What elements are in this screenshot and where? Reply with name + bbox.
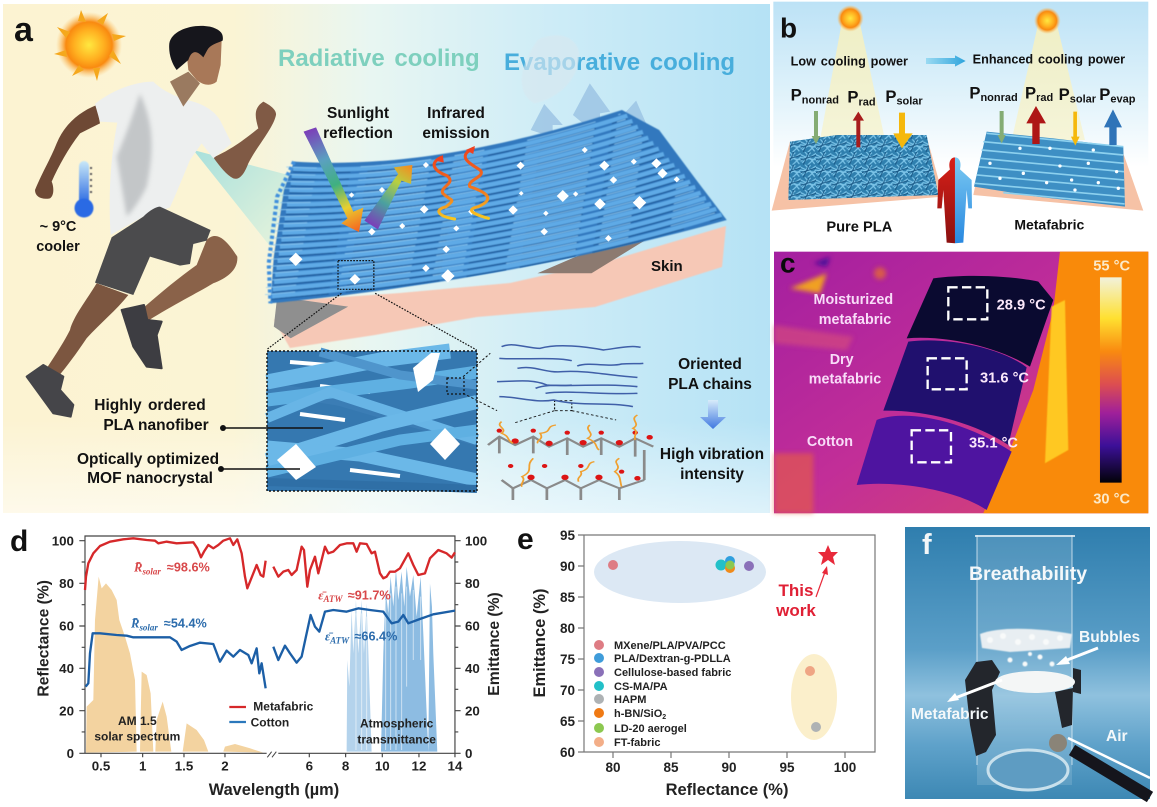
infrared emission waves — [434, 146, 488, 219]
annotation: cotton solar reflectance: R̄ — [130, 617, 139, 631]
label: oriented PLA chains: Oriented — [678, 356, 742, 373]
warm regions — [774, 257, 886, 513]
annotation: metafabric solar reflectance: R̄ — [133, 561, 142, 575]
legend — [594, 640, 731, 749]
right y-axis numbers: 0 — [465, 746, 472, 761]
arrow: air inflow — [1068, 738, 1150, 778]
y-axis numbers: 75 — [560, 652, 575, 667]
x-axis numbers: 12 — [412, 758, 426, 773]
x-axis numbers: 95 — [779, 760, 795, 775]
label: sunlight reflection: Sunlight — [327, 105, 389, 122]
y-axis numbers: 60 — [560, 745, 575, 760]
power labels: metafabric: P — [1059, 85, 1070, 104]
temperature drop label: cooler — [36, 239, 80, 255]
y-axis numbers: 70 — [560, 683, 575, 698]
x-axis numbers: 8 — [342, 758, 349, 773]
power labels: metafabric: P — [1025, 83, 1036, 102]
power labels: metafabric: P — [1099, 85, 1110, 104]
region ellipses — [594, 541, 837, 740]
left y-axis numbers: 0 — [67, 746, 74, 761]
legend: Cotton — [251, 716, 289, 730]
power labels: metafabric: nonrad — [980, 92, 1018, 104]
legend: FT-fabric — [614, 737, 660, 749]
label: infrared emission: emission — [422, 125, 490, 142]
oriented PLA chains and molecular structure — [463, 345, 653, 500]
selection box and zoom guides — [267, 261, 477, 350]
legend: HAPM — [614, 694, 646, 706]
annotation: metafabric atmospheric window emittance: ATW — [323, 594, 343, 604]
icon: human half red half blue — [937, 157, 972, 243]
clips — [965, 660, 1081, 756]
colour bar labels: 55 °C — [1093, 259, 1130, 275]
annotation: cotton solar reflectance: ≈54.4% — [164, 617, 207, 631]
temperature colour bar — [1100, 277, 1122, 483]
x-axis numbers: 1.5 — [175, 758, 194, 773]
foam bubbles — [980, 629, 1072, 666]
left y-axis numbers — [52, 533, 74, 761]
enhanced cooling power label: Enhanced cooling power — [973, 52, 1125, 66]
x-axis numbers — [92, 758, 463, 773]
right y-axis numbers — [465, 533, 487, 761]
legend: h-BN/SiO — [614, 708, 662, 720]
power labels: pure PLA: nonrad — [802, 94, 839, 106]
y-axis title: Emittance (%) — [531, 588, 549, 698]
temperature drop label: ~ 9°C — [40, 219, 77, 235]
power labels: pure PLA: P — [885, 87, 896, 106]
warm band along the arm — [1045, 300, 1068, 463]
annotation: cotton atmospheric window emittance: ≈66.4% — [354, 630, 397, 644]
label: breathability: Breathability — [969, 563, 1087, 585]
legend — [229, 700, 314, 730]
measurement boxes — [912, 287, 987, 462]
power labels: metafabric: solar — [1070, 94, 1097, 106]
label: metafabric: Metafabric — [1014, 216, 1084, 232]
power labels: pure PLA: solar — [896, 96, 923, 108]
metafabric skin and fibers — [973, 132, 1143, 211]
label: PLA nanofiber: PLA nanofiber — [103, 417, 209, 434]
this work label: work — [775, 601, 816, 620]
AM 1.5 solar spectrum area — [86, 577, 263, 753]
legend: PLA/Dextran-g-PDLLA — [614, 653, 731, 665]
y-axis numbers: 85 — [560, 590, 575, 605]
x-axis numbers: 85 — [663, 760, 679, 775]
annotation: cotton atmospheric window emittance: ATW — [329, 635, 350, 645]
panel a: cooling mechanism overview — [3, 4, 770, 513]
label: MOF nanocrystal: Optically optimized — [77, 451, 219, 468]
label: bubbles: Bubbles — [1079, 629, 1140, 646]
x-axis numbers — [605, 760, 856, 775]
colour bar labels — [1093, 259, 1130, 507]
temperature readings: 28.9 °C — [997, 297, 1046, 313]
heading: radiative cooling: Radiative cooling — [278, 45, 480, 72]
low cooling power label: Low cooling power — [791, 54, 908, 68]
skin layer — [274, 226, 726, 348]
panel label c: c — [780, 248, 796, 279]
label: metafabric: Metafabric — [911, 706, 989, 723]
leader line: PLA nanofiber — [220, 425, 323, 431]
icon: thermometer — [74, 161, 94, 218]
y-axis numbers: 95 — [560, 528, 575, 543]
panel e: scatter comparison chart — [517, 523, 875, 799]
moisturized metafabric region — [907, 276, 1053, 367]
leader line: MOF nanocrystal — [218, 466, 300, 472]
label: PLA nanofiber: Highly ordered — [94, 397, 206, 414]
sunlight reflection arrows — [304, 127, 412, 232]
heading: evaporative cooling: Evaporative cooling — [504, 49, 735, 76]
label: AM 1.5 solar spectrum: solar spectrum — [94, 730, 180, 744]
fabric layer with fibers and crystals — [265, 110, 727, 350]
cotton curve — [86, 608, 455, 688]
x-axis numbers: 10 — [375, 758, 390, 773]
icon: suns — [837, 5, 1061, 34]
right y-axis numbers: 20 — [465, 703, 480, 718]
annotation: metafabric solar reflectance: ≈98.6% — [167, 561, 210, 575]
legend: Metafabric — [253, 700, 314, 714]
y-axis numbers: 80 — [560, 621, 575, 636]
temperature readings — [969, 297, 1046, 451]
power labels: pure PLA: P — [791, 86, 802, 105]
air tube — [1049, 734, 1150, 797]
this work label: This — [779, 581, 813, 600]
power labels: metafabric: evap — [1110, 94, 1136, 106]
label: oriented PLA chains: PLA chains — [668, 376, 752, 393]
panel label b: b — [780, 12, 797, 43]
arrow: metafabric — [947, 680, 1002, 702]
x-axis title: Reflectance (%) — [666, 781, 788, 799]
x-axis numbers: 6 — [306, 758, 313, 773]
evaporation vapor and arrows — [522, 35, 649, 137]
x-axis numbers: 0.5 — [92, 758, 111, 773]
x-axis numbers: 2 — [221, 758, 229, 773]
zoom inset: nanofibers and MOF crystals — [267, 351, 477, 491]
metafabric disc — [995, 671, 1075, 693]
axes frame and ticks — [79, 536, 461, 757]
panel label f: f — [922, 529, 932, 561]
y-axis numbers: 65 — [560, 714, 575, 729]
label: atmospheric transmittance: transmittance — [357, 732, 436, 746]
legend: CS-MA/PA — [614, 681, 668, 693]
pure PLA skin and mesh — [772, 135, 943, 211]
x-axis numbers: 80 — [605, 760, 621, 775]
fabric labels — [807, 292, 893, 450]
fabric labels: metafabric — [819, 312, 891, 328]
glass cylinder — [975, 535, 1075, 790]
x-axis numbers: 14 — [448, 758, 463, 773]
sun beams — [820, 23, 1085, 140]
y-axis numbers: 90 — [560, 559, 575, 574]
panel f: breathability photo — [905, 527, 1150, 799]
power labels: pure PLA — [791, 86, 923, 108]
annotation: cotton atmospheric window emittance: ε̄ — [325, 630, 334, 644]
x-axis numbers: 90 — [721, 760, 737, 775]
panel label e: e — [517, 523, 534, 556]
power labels: pure PLA: P — [847, 88, 858, 107]
MOF crystals in inset — [277, 353, 460, 480]
left y-axis numbers: 100 — [52, 533, 74, 548]
legend: Cellulose-based fabric — [614, 667, 731, 679]
power labels: pure PLA: rad — [858, 96, 876, 108]
temperature readings: 35.1 °C — [969, 435, 1018, 451]
legend: 2 — [662, 714, 666, 721]
arrows: metafabric fluxes — [998, 106, 1122, 146]
temperature readings: 31.6 °C — [980, 370, 1029, 386]
icon: sun — [54, 10, 126, 81]
annotation: metafabric solar reflectance: solar — [141, 566, 161, 576]
right y-axis numbers: 100 — [465, 533, 487, 548]
label: MOF nanocrystal: MOF nanocrystal — [87, 470, 213, 487]
left y-axis numbers: 80 — [59, 576, 74, 591]
y-axis numbers — [560, 528, 575, 760]
annotation: metafabric atmospheric window emittance: ≈91.7% — [348, 588, 391, 602]
label: pure PLA: Pure PLA — [826, 220, 893, 236]
legend: LD-20 aerogel — [614, 723, 687, 735]
arrow: enhancement — [926, 55, 966, 67]
left y-axis numbers: 60 — [59, 619, 74, 634]
data points — [608, 556, 821, 732]
x-axis numbers: 1 — [139, 758, 147, 773]
fabric labels: metafabric — [809, 371, 881, 387]
panel label a: a — [14, 11, 34, 49]
star: this work — [818, 545, 838, 565]
power labels: metafabric: rad — [1036, 92, 1053, 104]
annotation: metafabric atmospheric window emittance: ε̄ — [318, 588, 327, 602]
power labels: metafabric — [969, 83, 1136, 106]
panel d: spectra chart — [10, 525, 503, 799]
fabric labels: Cotton — [807, 434, 853, 450]
label: atmospheric transmittance: Atmospheric — [360, 716, 434, 730]
atmospheric transmittance area — [347, 567, 437, 752]
panel b: cooling power comparison — [772, 2, 1148, 243]
axes frame and ticks — [578, 535, 875, 758]
right y-axis title: Emittance (%) — [486, 592, 503, 696]
arrow to star — [816, 566, 828, 597]
right y-axis numbers: 60 — [465, 619, 480, 634]
left y-axis numbers: 20 — [59, 703, 74, 718]
label: air: Air — [1106, 728, 1128, 745]
label: high vibration intensity: High vibration — [660, 446, 764, 463]
label: sunlight reflection: reflection — [323, 125, 393, 142]
legend: MXene/PLA/PVA/PCC — [614, 640, 726, 652]
label: infrared emission: Infrared — [427, 105, 485, 122]
label: AM 1.5 solar spectrum: AM 1.5 — [118, 714, 157, 728]
arrow: bubbles — [1056, 648, 1098, 665]
right y-axis numbers: 80 — [465, 576, 480, 591]
colour bar labels: 30 °C — [1093, 491, 1130, 507]
arrows: pure PLA fluxes — [812, 111, 913, 148]
label: skin: Skin — [651, 258, 683, 275]
cotton region — [857, 416, 1012, 510]
panel c: thermal image — [774, 248, 1148, 513]
runner figure — [27, 26, 288, 417]
power labels: metafabric: P — [969, 83, 980, 102]
label: high vibration intensity: intensity — [680, 466, 744, 483]
left y-axis numbers: 40 — [59, 661, 74, 676]
right y-axis numbers: 40 — [465, 661, 480, 676]
dry metafabric region — [883, 340, 1027, 445]
x-axis numbers: 100 — [834, 760, 856, 775]
panel label d: d — [10, 525, 28, 558]
annotation: cotton solar reflectance: solar — [138, 622, 158, 632]
x-axis title: Wavelength (µm) — [209, 781, 339, 799]
orange background on right — [983, 252, 1148, 513]
fabric labels: Moisturized — [814, 292, 893, 308]
left y-axis title: Reflectance (%) — [36, 580, 53, 697]
fabric labels: Dry — [830, 352, 854, 368]
metafabric curve — [85, 538, 455, 590]
icon: down arrow — [700, 400, 726, 429]
